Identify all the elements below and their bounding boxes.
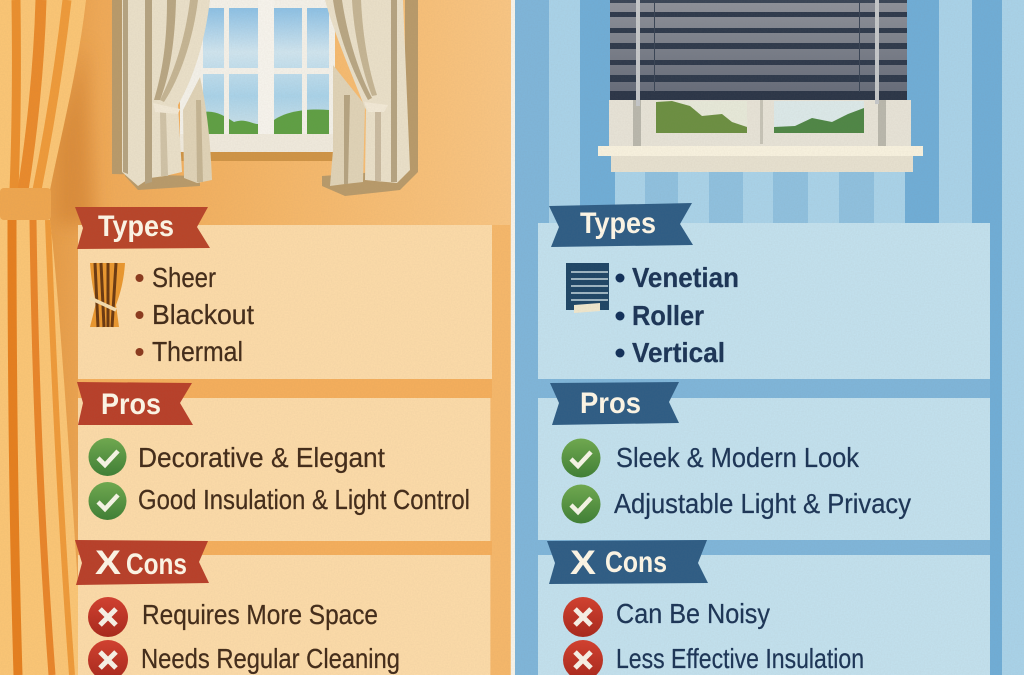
list: curtain pros xyxy=(88,438,470,520)
heading: types: Types xyxy=(580,207,656,240)
heading: cons xyxy=(547,540,708,584)
heading: cons: Cons xyxy=(126,548,187,581)
list: blind pros xyxy=(562,438,911,524)
heading: pros: Pros xyxy=(101,388,161,421)
panel: curtains xyxy=(0,0,511,675)
panel: cons card xyxy=(78,555,490,675)
panel: cons card xyxy=(538,555,990,675)
window: blinds side xyxy=(598,100,923,172)
heading: types xyxy=(75,207,210,249)
heading: cons: X xyxy=(570,544,596,582)
icon: curtain xyxy=(90,263,125,327)
divider strip: upper xyxy=(538,379,990,398)
heading: pros xyxy=(550,382,679,425)
list: blind cons: Less Effective Insulation xyxy=(616,643,864,674)
panel: pros card xyxy=(78,398,490,541)
wall background: blinds xyxy=(511,0,1024,675)
window curtain: left xyxy=(112,0,212,190)
list: blind types: Vertical xyxy=(632,337,725,368)
wall background: curtains xyxy=(0,0,511,675)
list: curtain pros: Good Insulation & Light Control xyxy=(138,484,470,515)
list: blind types: Roller xyxy=(632,300,704,331)
icon: blinds xyxy=(566,263,609,313)
right wall strip xyxy=(491,225,510,675)
list: blind pros: Adjustable Light & Privacy xyxy=(614,488,911,519)
list: curtain pros: Decorative & Elegant xyxy=(138,442,385,473)
window: curtains side xyxy=(180,0,335,161)
panel: pros card xyxy=(538,398,990,540)
list: curtain types: Blackout xyxy=(152,299,254,330)
heading: cons: Cons xyxy=(605,546,667,579)
panel: types card xyxy=(78,225,492,379)
panel: types card xyxy=(538,223,990,379)
list: blind types: Venetian xyxy=(632,262,739,293)
heading: pros xyxy=(77,382,193,425)
list: curtain types xyxy=(136,262,254,367)
heading: cons: X xyxy=(95,544,121,582)
curtain shadow on wall xyxy=(55,40,95,225)
list: curtain types: Sheer xyxy=(152,262,216,293)
list: blind cons: Can Be Noisy xyxy=(616,598,770,629)
list: curtain cons: Requires More Space xyxy=(142,599,378,630)
venetian blinds xyxy=(610,0,907,106)
divider strip: upper xyxy=(78,379,492,398)
heading: cons xyxy=(75,540,209,585)
list: blind cons xyxy=(563,597,864,675)
list: curtain cons xyxy=(88,597,400,675)
list: curtain cons: Needs Regular Cleaning xyxy=(141,643,400,674)
divider strip: lower xyxy=(538,540,990,555)
panel: blinds xyxy=(511,0,1024,675)
list: blind pros: Sleek & Modern Look xyxy=(616,442,860,473)
heading: pros: Pros xyxy=(580,387,641,420)
divider strip: lower xyxy=(78,541,492,555)
window curtain: right xyxy=(322,0,418,196)
large orange curtain xyxy=(0,0,90,675)
list: blind types xyxy=(616,262,739,368)
list: curtain types: Thermal xyxy=(152,336,243,367)
heading: types xyxy=(549,203,693,247)
heading: types: Types xyxy=(98,210,174,243)
